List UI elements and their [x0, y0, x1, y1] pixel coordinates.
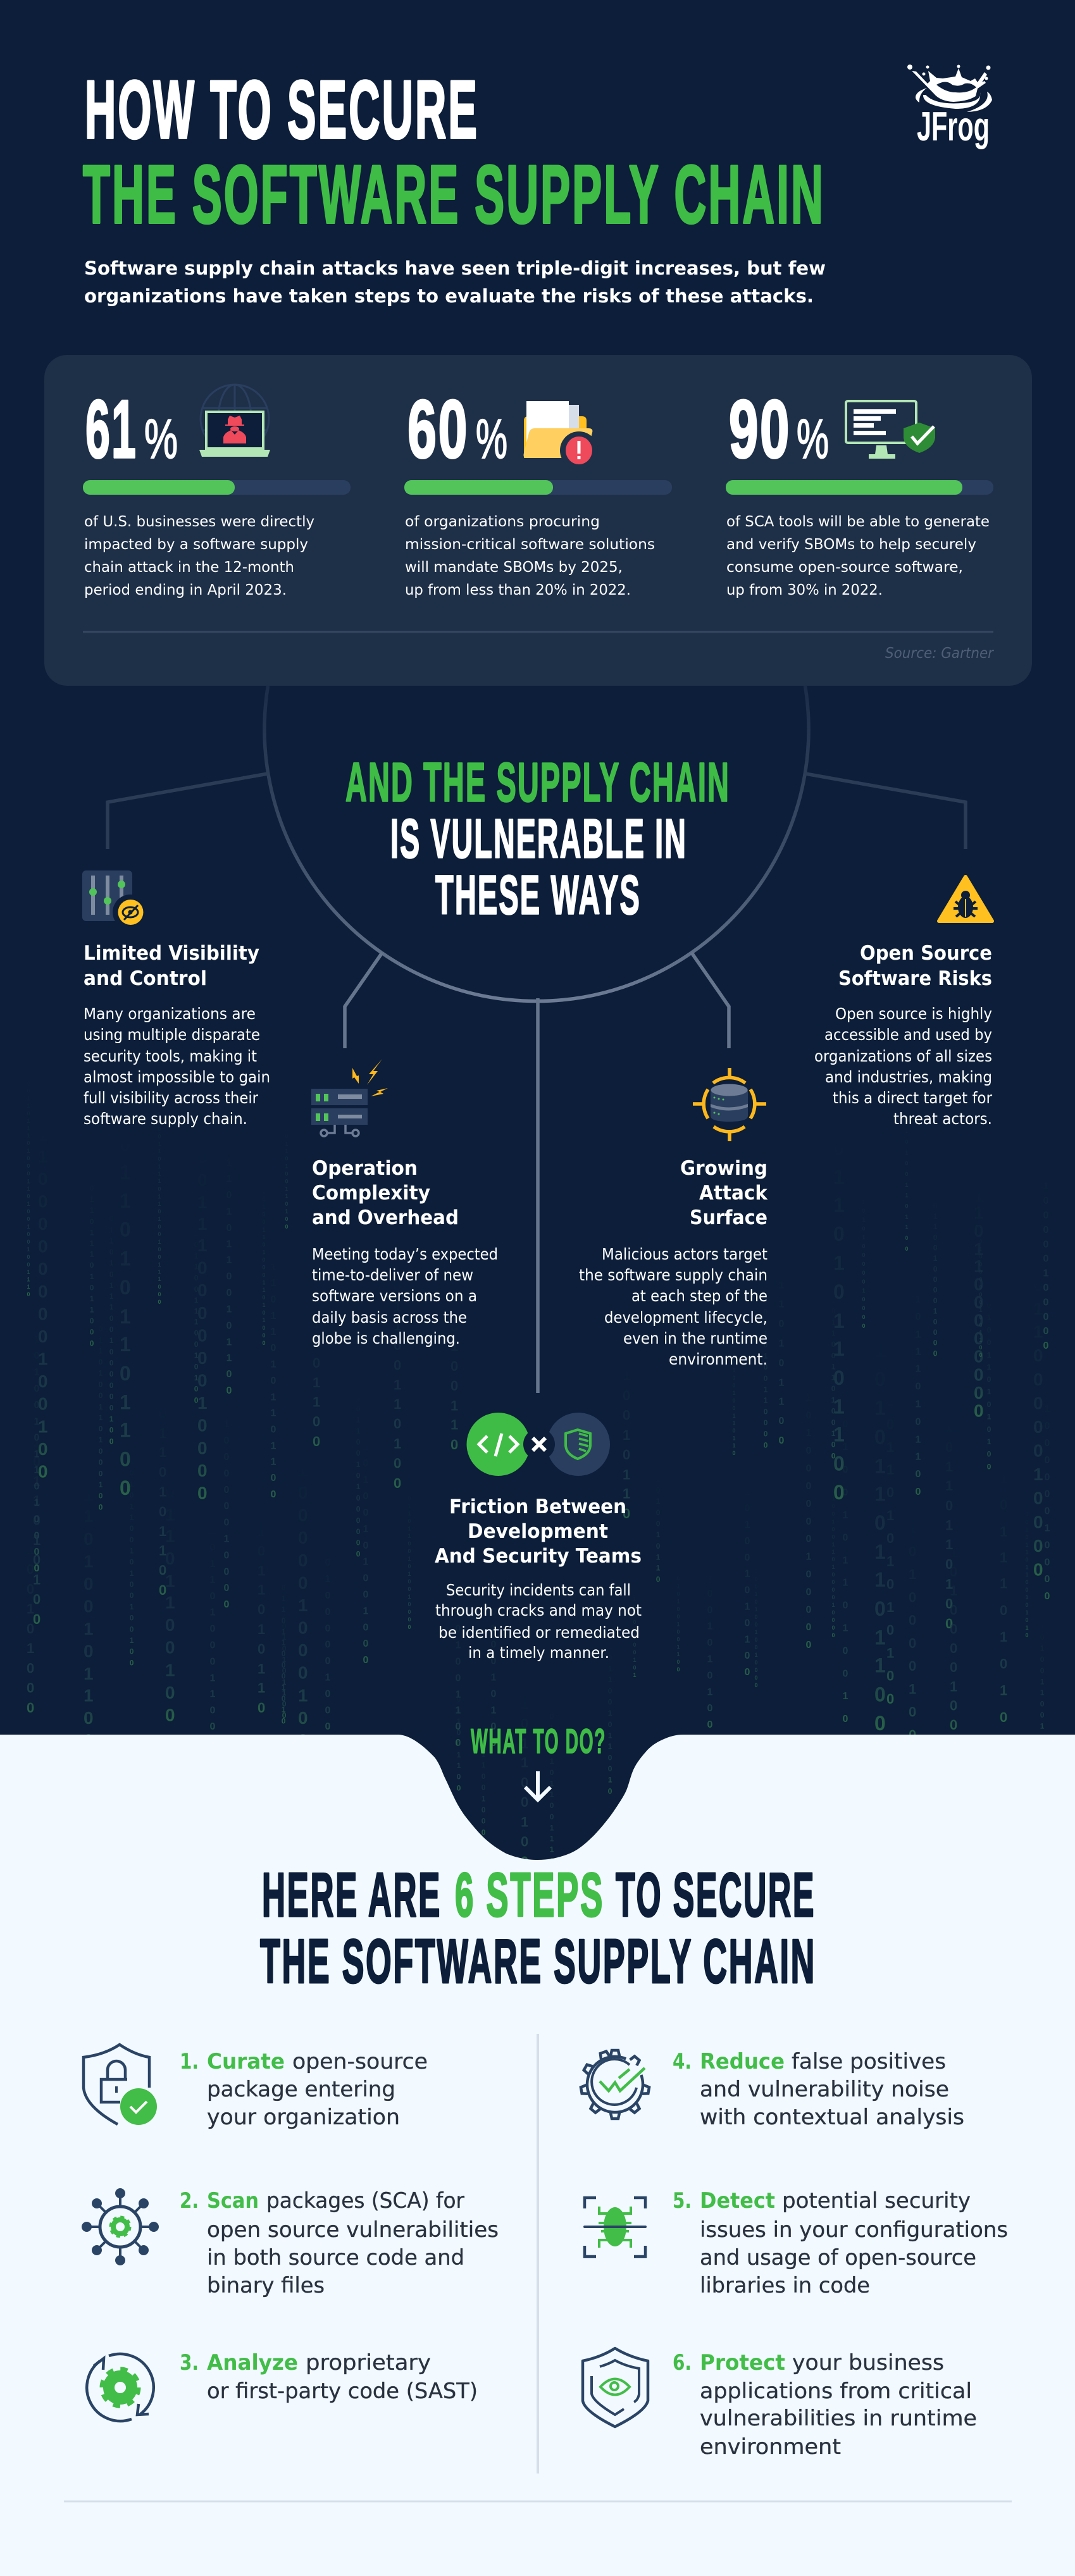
text: 1101010000010000 [862, 1190, 871, 1329]
item: operation complexity: Operation [312, 1157, 418, 1180]
icon: code versus shield [467, 1413, 610, 1476]
icon: sliders with hidden eye [82, 870, 148, 930]
icon: server with bolts [311, 1059, 388, 1136]
text: 1001010100 [707, 1572, 723, 1730]
stat: 61% [83, 383, 351, 598]
step 6: protect [583, 2348, 977, 2459]
step 6: protect: Protect [700, 2350, 785, 2375]
item: friction between teams: Security incidents can fall [446, 1581, 631, 1599]
heading: six steps [260, 1860, 816, 1996]
heading: six steps: 6 STEPS [455, 1860, 604, 1929]
panel: statistics [44, 355, 1032, 686]
step 2: scan: 2. [180, 2188, 199, 2213]
item: limited visibility: almost impossible to gain [84, 1068, 270, 1086]
icon: shield eye [583, 2348, 648, 2427]
text: 1101001101100 [905, 1117, 916, 1252]
text: 1101100000000 [974, 1186, 992, 1420]
stat text: will mandate SBOMs by 2025, [405, 558, 623, 576]
icon: gear refresh [87, 2354, 154, 2421]
item: friction between teams: And Security Teams [435, 1545, 642, 1568]
text: 100101101100101010 [1025, 1504, 1033, 1638]
step 5: detect: 5. [673, 2188, 692, 2213]
stat text [405, 512, 655, 598]
text: 1010110010100100100 [130, 1458, 140, 1667]
step 2: scan: open source vulnerabilities [207, 2217, 499, 2242]
item: operation complexity: Meeting today’s expected [312, 1245, 498, 1263]
step 4: reduce [580, 2049, 964, 2129]
source note: Source: Gartner [885, 645, 994, 662]
text: 1101001101110110100100111000 [158, 1096, 166, 1305]
step 2: scan: packages (SCA) for [266, 2188, 464, 2213]
heading: supply chain vulnerable: AND THE SUPPLY CHAIN [345, 752, 730, 814]
item: limited visibility: security tools, making it [84, 1047, 257, 1065]
text: 1011001000 [482, 1728, 492, 1836]
text: 10010110 [623, 1368, 642, 1521]
item: growing attack surface: environment. [669, 1350, 767, 1368]
text: 1001100 [313, 1315, 332, 1449]
item: limited visibility: full visibility across their [84, 1089, 259, 1107]
heading: six steps: HERE ARE [262, 1860, 442, 1929]
step 3: analyze: Analyze [207, 2350, 298, 2375]
item: growing attack surface: Malicious actors target [602, 1245, 767, 1263]
text: 1101000000100000 [806, 1375, 823, 1650]
heading: supply chain vulnerable [345, 752, 730, 926]
step 2: scan: binary files [207, 2273, 325, 2298]
text: 101101001101000100 [99, 1313, 109, 1511]
text: 1010101100 [282, 1611, 293, 1719]
step 6: protect: 6. [673, 2350, 692, 2375]
stat: 60%: % [476, 407, 507, 470]
arrow: connector to operation complexity [345, 953, 382, 1048]
item: limited visibility: Many organizations are [84, 1005, 256, 1023]
stat: 60%: 60 [407, 383, 469, 475]
item: growing attack surface: the software supply chain [579, 1266, 767, 1284]
item: operation complexity: Complexity [312, 1182, 430, 1204]
text: 1010000100 [909, 1521, 931, 1743]
arrow: down [525, 1771, 550, 1800]
text: 10110110001010 [282, 1572, 292, 1725]
step 3: analyze: or first-party code (SAST) [207, 2379, 478, 2403]
item: open source risks: this a direct target for [833, 1089, 993, 1107]
item: growing attack surface: Growing [680, 1157, 767, 1180]
icon: database target [693, 1068, 766, 1141]
step 6: protect: applications from critical [700, 2379, 972, 2403]
step 4: reduce: Reduce [700, 2049, 785, 2074]
text: 1011010100 [33, 1434, 53, 1627]
text: 1001001100 [456, 1591, 471, 1749]
item: limited visibility [82, 870, 270, 1128]
item: open source risks: and industries, making [825, 1068, 992, 1086]
step 4: reduce: and vulnerability noise [700, 2077, 949, 2102]
step 4: reduce: false positives [792, 2049, 946, 2074]
text: 0110101101100 [833, 1137, 862, 1504]
text: 101001011010010 [843, 1396, 865, 1725]
item: growing attack surface: Surface [690, 1206, 767, 1229]
text: 0110110101101100 [271, 1246, 287, 1500]
text: 1100000000100100 [38, 1125, 61, 1481]
item: limited visibility: and Control [84, 967, 207, 990]
stat text [84, 512, 314, 598]
item: growing attack surface [579, 1068, 768, 1368]
text: 1011001100 [457, 1683, 468, 1792]
item: open source risks: organizations of all sizes [814, 1047, 992, 1065]
text: 0011100000010000 [197, 1148, 220, 1502]
heading: supply chain vulnerable: THESE WAYS [435, 864, 641, 926]
text: 1011001000010000 [933, 1191, 943, 1358]
item: friction between teams [435, 1413, 642, 1662]
step 5: detect: libraries in code [700, 2273, 870, 2298]
item: growing attack surface: development lifecycle, [604, 1308, 767, 1327]
icon: monitor shield [846, 401, 935, 459]
text: 10110010110010 [608, 1642, 619, 1795]
text: 0100110 [451, 1318, 470, 1452]
stat text [726, 512, 990, 598]
text: 10110110100 [945, 1420, 965, 1632]
text: 0110000010000 [1033, 1275, 1057, 1579]
text: 10110100110000 [764, 1296, 774, 1449]
item: operation complexity: time-to-deliver of new [312, 1266, 473, 1284]
text: 1010010100 [491, 1590, 507, 1749]
step 1: curate: Curate [207, 2049, 285, 2074]
icon: JFrog logo [907, 65, 992, 149]
text: 101001101010100 [987, 1288, 999, 1471]
item: open source risks: Open Source [860, 942, 992, 965]
text: 01101100100 [165, 1482, 188, 1725]
stat: 61%: 61 [85, 383, 137, 475]
text: 101001010100 [744, 1487, 761, 1678]
stat text: up from 30% in 2022. [726, 581, 883, 598]
item: open source risks: threat actors. [893, 1110, 992, 1128]
text: 101100100 [521, 1696, 540, 1869]
item: friction between teams: be identified or remediated [438, 1623, 640, 1642]
item: friction between teams: Development [468, 1520, 608, 1543]
text: 10110100110100 [285, 1125, 293, 1230]
stat text: period ending in April 2023. [84, 581, 287, 598]
text: 10110100011000 [210, 1526, 226, 1749]
text: 0110101100101100 [227, 1141, 242, 1396]
text: 1101001001101000010000 [831, 1473, 840, 1638]
item: friction between teams: in a timely manner. [468, 1644, 609, 1662]
text: 101001011001110 [550, 1701, 561, 1865]
stat text: impacted by a software supply [84, 535, 308, 553]
text: 100100000001001100 [979, 1223, 987, 1358]
what to do heading: WHAT TO DO? [471, 1721, 606, 1761]
text: 1011011101011000 [90, 1173, 101, 1347]
arrow: connector to growing attack surface [692, 953, 729, 1048]
text: 1101001101000110101000 [262, 1181, 270, 1346]
stat text: consume open-source software, [726, 558, 963, 576]
stat: 61%: % [144, 407, 178, 470]
item: growing attack surface: even in the runtime [623, 1329, 767, 1347]
text: 101100110100100 [831, 1296, 842, 1460]
progress bar: 61% [83, 480, 351, 495]
text: 101100101000000 [356, 1393, 367, 1558]
stat text: chain attack in the 12-month [84, 558, 294, 576]
step 4: reduce: with contextual analysis [700, 2105, 964, 2129]
stat text: mission-critical software solutions [405, 535, 655, 553]
item: operation complexity: software versions on a [312, 1287, 477, 1305]
text: 110100100101 [633, 1588, 641, 1678]
icon: shield lock [84, 2045, 157, 2125]
text: 0101110101100 [915, 1277, 933, 1497]
text: 1010010110 [656, 1475, 667, 1583]
icon: bug scan [583, 2198, 647, 2257]
step 3: analyze: 3. [180, 2350, 199, 2375]
text: 0110101100 [159, 1406, 178, 1598]
text: 1100000100000 [1043, 1167, 1057, 1351]
icon: JFrog logo: JFrog [917, 103, 990, 149]
heading: supply chain vulnerable: IS VULNERABLE IN [390, 808, 687, 869]
step 3: analyze: proprietary [306, 2350, 431, 2375]
step 6: protect: environment [700, 2434, 841, 2459]
text: 0110101101100 [120, 1132, 149, 1499]
icon: network gear [82, 2188, 159, 2265]
heading: six steps: TO SECURE [616, 1860, 816, 1929]
step 2: scan [82, 2188, 499, 2298]
item: limited visibility: Limited Visibility [84, 942, 259, 965]
step 1: curate: package entering [207, 2077, 395, 2102]
text: 1011011001010010000 [407, 1488, 416, 1630]
icon: warning bug [939, 877, 992, 921]
text: 1000001000100 [298, 1460, 321, 1750]
item: operation complexity: daily basis across the [312, 1308, 467, 1327]
step 2: scan: Scan [207, 2188, 259, 2213]
stat text: of U.S. businesses were directly [84, 512, 314, 530]
text: 01100110100 [394, 1279, 413, 1491]
text: 110100100110110 [733, 1344, 740, 1456]
step 4: reduce: 4. [673, 2049, 692, 2074]
icon: gear check [580, 2049, 650, 2120]
text: 11001010010010000 [754, 1561, 762, 1688]
step 6: protect: your business [792, 2350, 944, 2375]
item: operation complexity: and Overhead [312, 1206, 459, 1229]
item: open source risks: accessible and used by [824, 1025, 992, 1044]
item: friction between teams: through cracks and may not [435, 1601, 642, 1619]
item: limited visibility: software supply chain. [84, 1110, 247, 1128]
stat text: and verify SBOMs to help securely [726, 535, 976, 553]
item: operation complexity [311, 1059, 498, 1347]
item: limited visibility: using multiple disparate [84, 1025, 260, 1044]
title: HOW TO SECURE [85, 63, 479, 156]
item: growing attack surface: at each step of the [631, 1287, 767, 1305]
text: 10110101010100 [886, 1394, 909, 1707]
arrow: connector to limited visibility [108, 774, 268, 849]
item: open source risks [814, 877, 993, 1128]
item: operation complexity: globe is challenging. [312, 1329, 460, 1347]
step 5: detect: Detect [700, 2188, 775, 2213]
text: 0100000010000 [1044, 1387, 1061, 1602]
step 3: analyze [87, 2350, 478, 2421]
step 5: detect: issues in your configurations [700, 2217, 1008, 2242]
text: 1101001011010000 [34, 1318, 50, 1574]
text: 1011001110010100 [194, 1229, 205, 1404]
arrow: connector to open source risks [805, 774, 966, 849]
item: open source risks: Software Risks [838, 967, 992, 990]
text: 1011101010 [1000, 1470, 1026, 1725]
step 5: detect [583, 2188, 1008, 2298]
text: 110100101100 [84, 1485, 106, 1750]
step 5: detect: potential security [782, 2188, 971, 2213]
text: 10100110010 [1040, 1621, 1051, 1742]
text: 1010000100 [950, 1545, 969, 1733]
item: open source risks: Open source is highly [835, 1005, 992, 1023]
step 1: curate: open-source [292, 2049, 428, 2074]
stat text: of SCA tools will be able to generate [726, 512, 990, 530]
stat: 90%: 90 [729, 383, 791, 475]
text: 1010000010001 [325, 1541, 341, 1749]
text: 0110101100 [778, 1261, 798, 1446]
stat: 90% [726, 383, 993, 598]
text: 10101101101100 [874, 1339, 904, 1735]
step 5: detect: and usage of open-source [700, 2245, 976, 2270]
text: 1011010111001000000100 [109, 1203, 120, 1446]
text: 1011010110 [258, 1523, 277, 1716]
central circle [264, 686, 809, 1001]
progress bar: 90% [726, 480, 993, 495]
progress bar: 60% [404, 480, 672, 495]
arrow: connector to friction [536, 998, 540, 1393]
stat: 60% [404, 383, 672, 598]
text: 100101000 [27, 1542, 46, 1716]
intro text: Software supply chain attacks have seen triple-digit increases, but few [84, 257, 826, 279]
panel: steps background [0, 1735, 1075, 2576]
step 1: curate [84, 2045, 428, 2129]
item: friction between teams: Friction Between [449, 1495, 626, 1518]
step 1: curate: your organization [207, 2105, 400, 2129]
intro text: organizations have taken steps to evaluate the risks of these attacks. [84, 285, 814, 307]
step 2: scan: in both source code and [207, 2245, 464, 2270]
step 1: curate: 1. [180, 2049, 199, 2074]
intro text [84, 257, 826, 307]
text: 100110111010001101001001001110 [27, 1073, 35, 1297]
icon: folder alert [524, 401, 598, 469]
title [83, 63, 825, 240]
text: 10101001001100 [677, 1568, 685, 1673]
icon: hacker laptop [199, 385, 270, 457]
text: 10100101001000 [363, 1442, 379, 1666]
item: growing attack surface: Attack [699, 1182, 768, 1204]
text: 1100000010000 [224, 1403, 240, 1610]
step 6: protect: vulnerabilities in runtime [700, 2406, 977, 2430]
stat: 90%: % [797, 407, 829, 470]
stat text: up from less than 20% in 2022. [405, 581, 631, 598]
stat text: of organizations procuring [405, 512, 600, 530]
